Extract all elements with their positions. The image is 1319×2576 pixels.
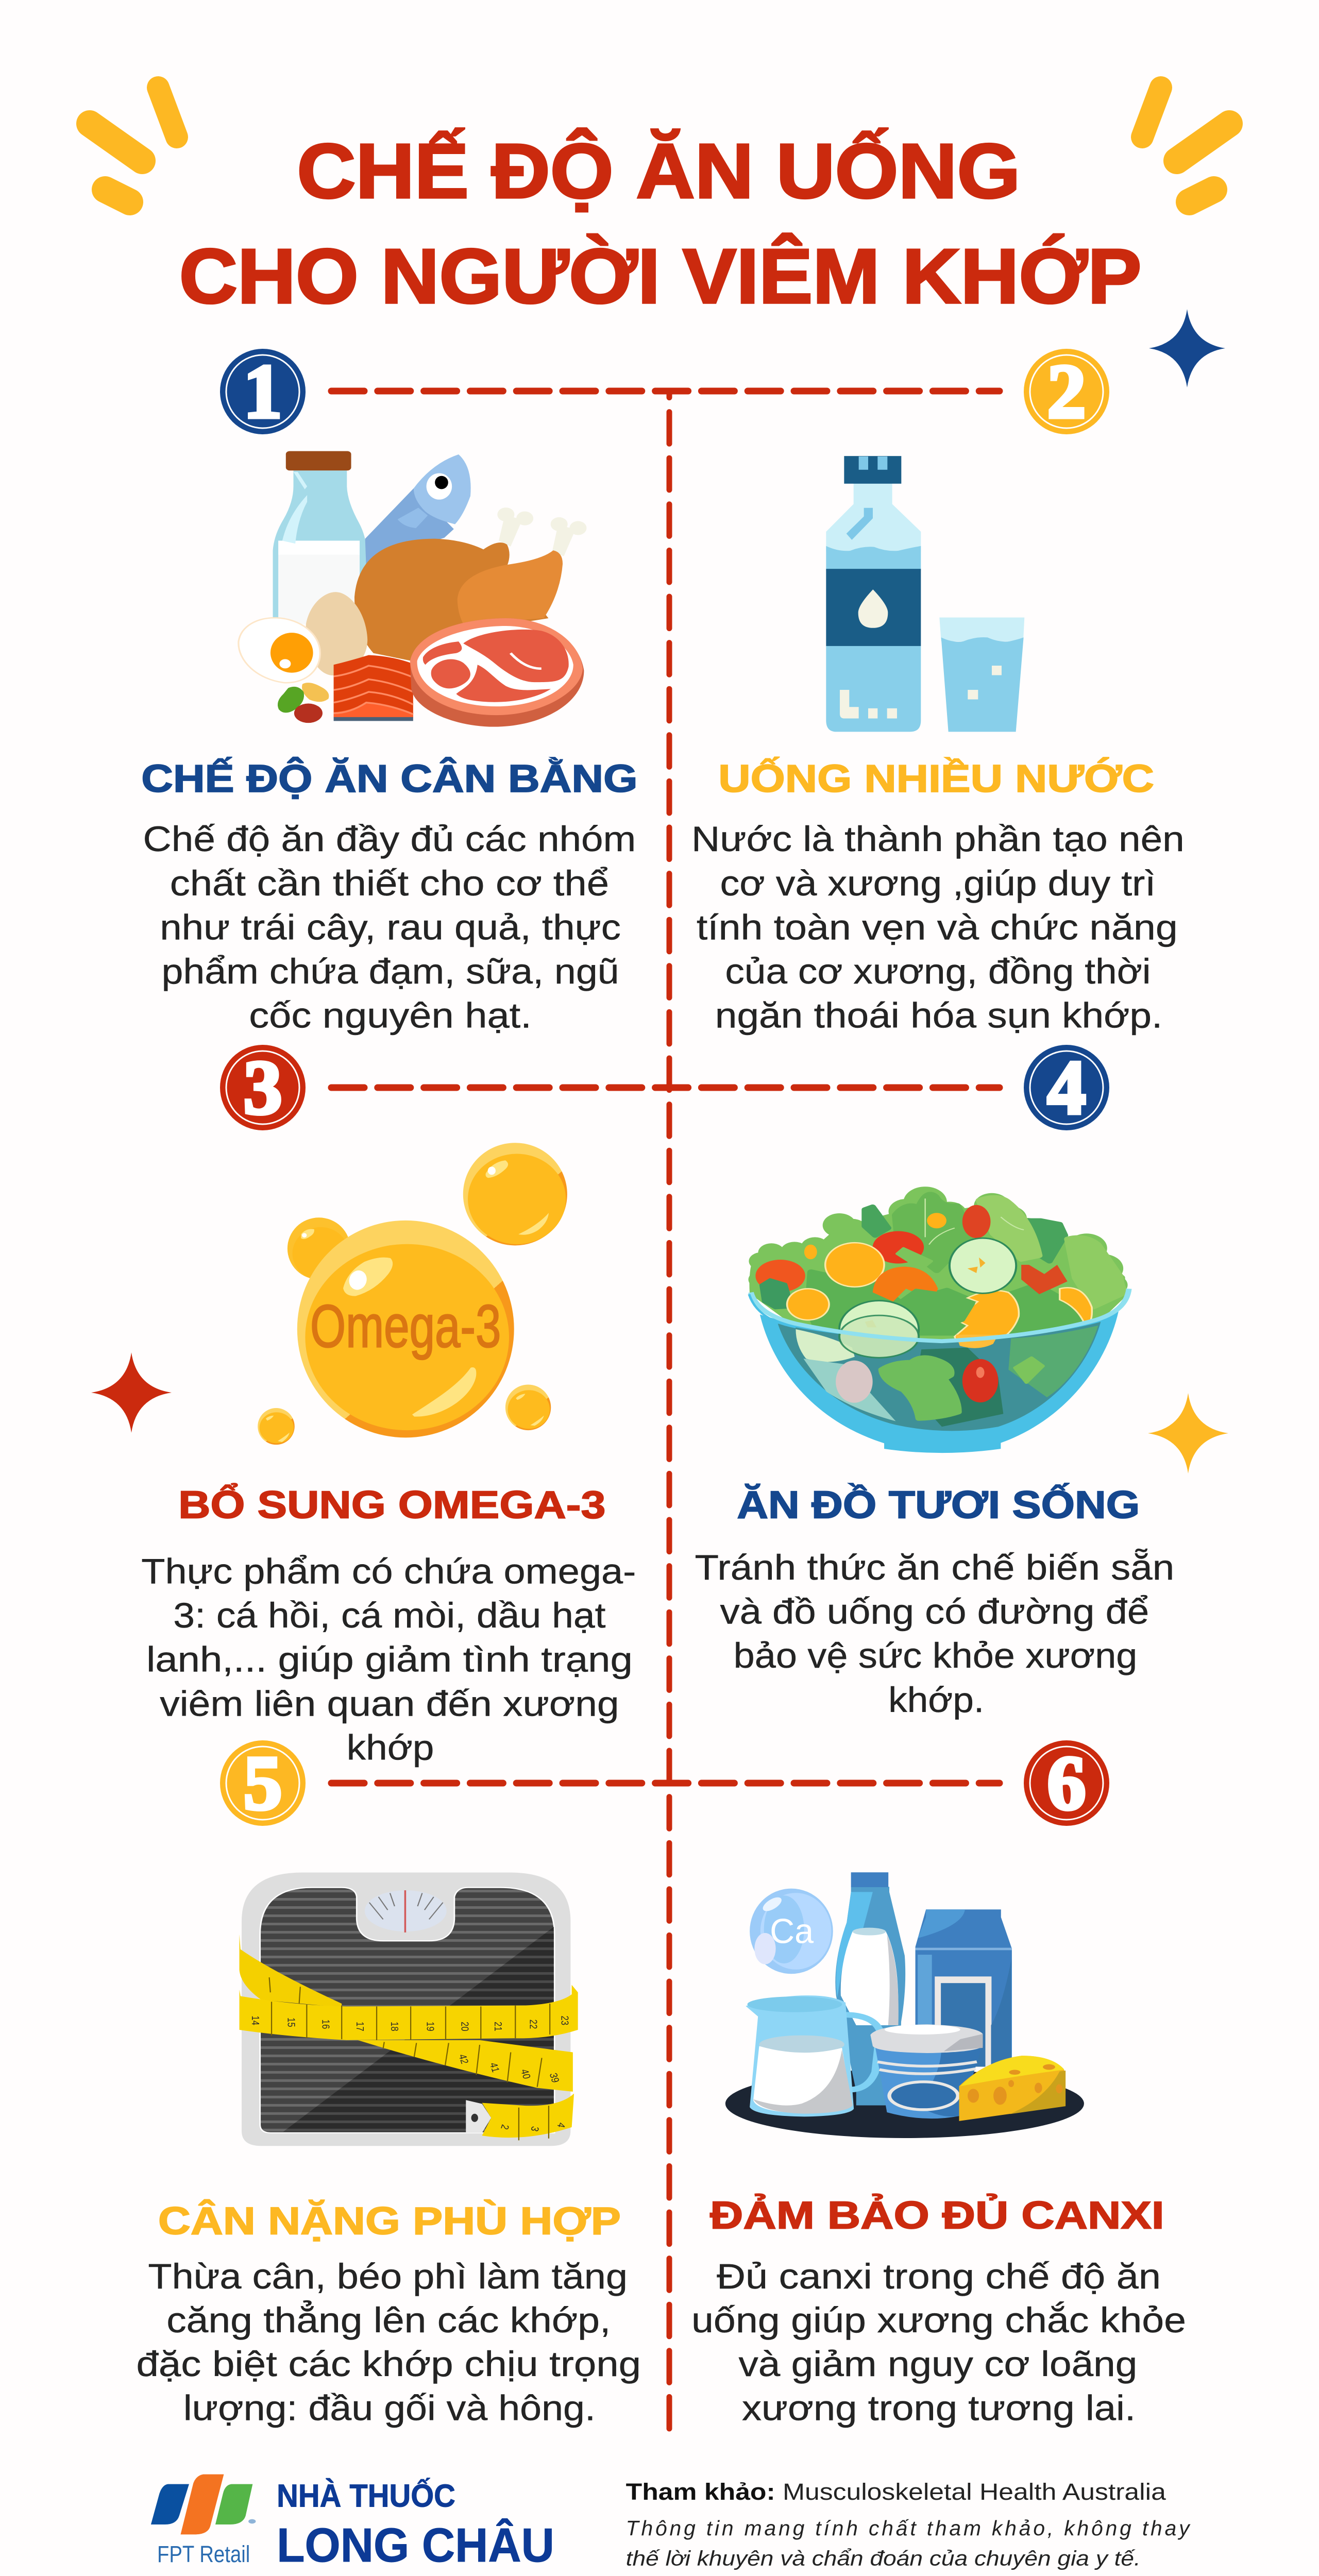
reference and disclaimer: thế lời khuyên và chẩn đoán của chuyên gia y tế. [626,2547,1141,2570]
body text [143,819,636,1035]
logo text: NHÀ THUỐC [277,2477,455,2514]
measuring tape: 4 [555,2122,568,2129]
body text: chất cần thiết cho cơ thể [170,863,609,903]
scale body [242,1873,570,2146]
number badge 5: 5 [243,1740,282,1826]
cucumber slices [839,1238,1016,1358]
panel: healthy weight text [136,2198,641,2428]
heading: BỔ SUNG OMEGA-3 [178,1483,606,1527]
panel: water text [691,757,1185,1035]
measuring tape: 42 [456,2053,471,2065]
logo text [157,2477,554,2572]
illustration: salad bowl [748,1187,1129,1453]
capsule bottom right [505,1385,551,1430]
heading: CHẾ ĐỘ ĂN CÂN BẰNG [141,756,638,800]
bottle [826,456,921,732]
body text: Nước là thành phần tạo nên [691,819,1185,859]
number badge 3: 3 [243,1045,282,1130]
number badge 6: 6 [1047,1740,1086,1826]
reference and disclaimer: Thông tin mang tính chất tham khảo, không thay [626,2516,1191,2540]
title: CHO NGƯỜI VIÊM KHỚP [179,233,1142,319]
measuring tape: 3 [529,2125,542,2132]
body text: Thừa cân, béo phì làm tăng [148,2257,628,2296]
glass [939,617,1024,732]
icon: blue star [1149,309,1225,387]
body text: như trái cây, rau quả, thực [160,907,621,947]
milk carton [916,1909,1012,2067]
body text: và đồ uống có đường để [720,1592,1149,1632]
central vertical dashed divider [667,393,672,2431]
measuring tape: 18 [389,2022,401,2031]
orange slices [787,1213,1092,1349]
measuring tape: 16 [320,2020,332,2029]
body text: và giảm nguy cơ loãng [738,2344,1137,2384]
yogurt cup [870,2024,983,2119]
measuring tape: 19 [425,2022,436,2031]
measuring tape: 2 [499,2124,512,2131]
measuring tape [240,1934,578,2140]
heading: ĐẢM BẢO ĐỦ CANXI [710,2194,1164,2237]
icon: red star [91,1352,172,1433]
main capsule [297,1221,514,1437]
measuring tape: 40 [518,2068,533,2080]
roast chicken [354,539,563,661]
body text: đặc biệt các khớp chịu trọng [136,2344,641,2384]
horizontal dashed divider row 1 [331,387,1000,395]
number badge 1: 1 [243,349,282,434]
eggs [239,592,367,683]
number badge 6 [1024,1740,1109,1826]
calcium bubble [750,1889,833,1974]
measuring tape: 22 [528,2020,539,2029]
body text: Thực phẩm có chứa omega- [141,1552,636,1591]
measuring tape: 39 [547,2072,562,2083]
measuring tape: 14 [250,2015,262,2025]
illustration: bathroom scale with measuring tape [240,1873,578,2146]
lettuce foliage [748,1187,1128,1340]
body text: bảo vệ sức khỏe xương [734,1636,1137,1675]
glass bowl [749,1289,1129,1453]
body text: cốc nguyên hạt. [249,995,532,1035]
panel: calcium text [691,2194,1186,2428]
body text: Tránh thức ăn chế biến sẵn [695,1548,1174,1587]
reference and disclaimer [626,2479,1191,2570]
fish [365,454,471,570]
tomatoes [755,1205,1068,1308]
heading: UỐNG NHIỀU NƯỚC [718,757,1154,800]
bottle [273,451,366,624]
salmon [334,655,413,721]
body text: cơ và xương ,giúp duy trì [720,863,1156,903]
logo: FPT Retail mark [151,2475,256,2534]
number badge 1 [220,349,306,434]
body text: xương trong tương lai. [742,2388,1136,2428]
measuring tape: 41 [487,2061,502,2073]
body text: ngăn thoái hóa sụn khớp. [715,995,1162,1035]
capsule top right [463,1143,567,1245]
body text: khớp. [888,1680,984,1720]
body text [141,1552,636,1768]
body text: khớp [347,1728,434,1768]
body text: tính toàn vẹn và chức năng [697,907,1178,947]
body text: căng thẳng lên các khớp, [166,2300,611,2340]
milk bottle [835,1872,905,2105]
number badge 2 [1024,349,1109,434]
horizontal dashed divider row 3 [331,1780,1000,1787]
body text: 3: cá hồi, cá mòi, dầu hạt [173,1596,606,1635]
number badge 4: 4 [1047,1045,1086,1130]
panel: omega-3 text [141,1483,636,1768]
body text [695,1548,1174,1720]
body text [691,2257,1186,2428]
decorative yellow rays, top left [90,88,177,202]
capsule left [288,1217,350,1280]
logo text: FPT Retail [157,2541,250,2567]
body text: Đủ canxi trong chế độ ăn [717,2257,1161,2296]
title [179,128,1142,319]
cheese wedge [959,2056,1066,2121]
body text [136,2257,641,2428]
measuring tape: 21 [493,2022,504,2031]
calcium bubble: Ca [770,1912,814,1951]
glass jug [746,1995,880,2116]
steak [410,618,584,727]
number badge 4 [1024,1045,1109,1130]
measuring tape: 20 [459,2022,471,2031]
body text: uống giúp xương chắc khỏe [691,2300,1186,2340]
body text: của cơ xương, đồng thời [725,952,1151,991]
reference and disclaimer: Tham khảo: Musculoskeletal Health Australia [626,2479,1166,2505]
number badge 5 [220,1740,306,1826]
panel: balanced diet text [141,756,638,1035]
title: CHẾ ĐỘ ĂN UỐNG [297,128,1020,214]
dial [365,1890,447,1933]
label: Omega-3 [310,1293,501,1360]
body text [691,819,1185,1035]
illustration: balanced diet foods [239,451,586,727]
capsule bottom left [258,1408,295,1445]
decorative yellow rays, top right [1142,88,1229,202]
horizontal dashed divider row 2 [331,1084,1000,1091]
beans [278,683,329,723]
tray [725,2069,1084,2138]
panel: fresh food text [695,1483,1174,1720]
icon: yellow star [1148,1393,1228,1473]
measuring tape: 23 [559,2015,571,2025]
body text: lanh,... giúp giảm tình trạng [146,1640,633,1680]
bones [497,507,586,556]
body text: Chế độ ăn đầy đủ các nhóm [143,819,636,859]
measuring tape: 15 [285,2018,297,2027]
logo text: LONG CHÂU [277,2518,554,2572]
heading: CÂN NẶNG PHÙ HỢP [158,2198,621,2242]
body text: lượng: đầu gối và hông. [183,2388,596,2428]
measuring tape: 17 [354,2022,366,2031]
body text: viêm liên quan đến xương [160,1684,619,1723]
number badge 2: 2 [1047,349,1086,434]
illustration: water bottle and glass [826,456,1024,732]
illustration: calcium-rich dairy products [725,1872,1084,2138]
body text: phẩm chứa đạm, sữa, ngũ [161,952,619,991]
number badge 3 [220,1045,306,1130]
heading: ĂN ĐỒ TƯƠI SỐNG [737,1483,1140,1527]
illustration: omega-3 capsules [258,1143,567,1445]
